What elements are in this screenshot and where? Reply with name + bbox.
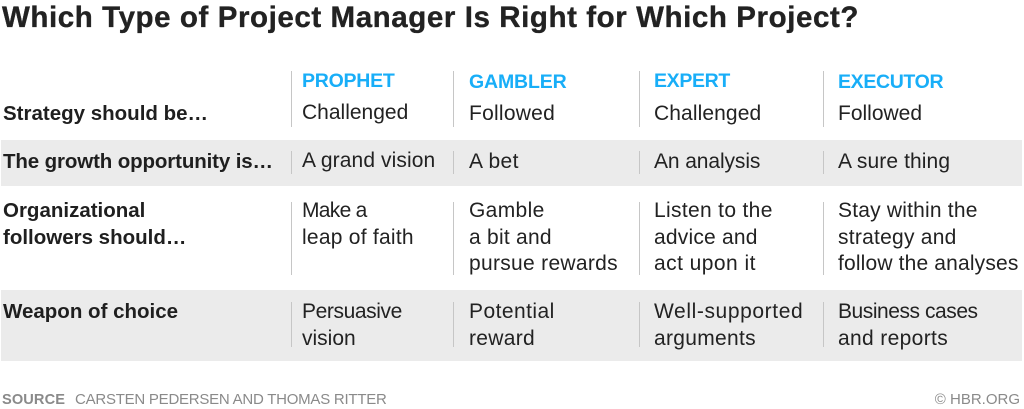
followers: executor: Stay within the [838, 199, 978, 222]
growth: expert: An analysis [654, 150, 760, 173]
title: Which Type of Project Manager Is Right for Which Project? [2, 1, 859, 34]
weapon: gambler: reward [469, 326, 535, 350]
row label: growth opportunity: The growth opportunity is… [3, 150, 273, 173]
growth: executor: A sure thing [838, 150, 950, 173]
weapon: prophet: Persuasive [302, 300, 402, 323]
growth: prophet: A grand vision [302, 149, 435, 172]
row band: growth opportunity [1, 140, 1022, 186]
weapon: prophet: vision [302, 326, 356, 350]
weapon: executor: Business cases [838, 300, 978, 323]
strategy: prophet: Challenged [302, 101, 408, 124]
row band: weapon of choice [1, 290, 1022, 361]
weapon: executor [838, 300, 978, 350]
row label: strategy: Strategy should be… [3, 102, 208, 125]
row label: weapon: Weapon of choice [3, 300, 178, 323]
followers: gambler: pursue rewards [469, 252, 618, 275]
row label: followers: followers should… [3, 226, 186, 248]
followers: executor: follow the analyses [838, 252, 1018, 275]
followers: executor [838, 199, 1018, 275]
weapon: expert: Well-supported [654, 300, 803, 323]
header: prophet: PROPHET [302, 70, 395, 92]
weapon: executor: and reports [838, 326, 948, 350]
weapon: prophet [302, 300, 402, 350]
followers: executor: strategy and [838, 226, 957, 248]
header: executor: EXECUTOR [838, 71, 943, 93]
followers: gambler: Gamble [469, 199, 545, 222]
strategy: expert: Challenged [654, 102, 761, 125]
source line: CARSTEN PEDERSEN AND THOMAS RITTER [75, 391, 387, 408]
row label: followers [3, 199, 186, 248]
weapon: gambler [469, 300, 555, 350]
followers: gambler [469, 199, 618, 275]
followers: prophet [302, 199, 414, 248]
followers: prophet: leap of faith [302, 226, 414, 248]
source line: SOURCE [2, 392, 65, 408]
strategy: executor: Followed [838, 102, 922, 125]
row label: followers: Organizational [3, 199, 145, 222]
followers: expert: Listen to the [654, 199, 773, 222]
header: expert: EXPERT [654, 70, 730, 92]
strategy: gambler: Followed [469, 102, 555, 125]
header: gambler: GAMBLER [469, 71, 567, 93]
followers: expert [654, 199, 773, 275]
weapon: gambler: Potential [469, 300, 555, 323]
weapon: expert: arguments [654, 326, 756, 350]
growth: gambler: A bet [469, 150, 519, 173]
followers: prophet: Make a [302, 199, 367, 222]
weapon: expert [654, 300, 803, 350]
followers: gambler: a bit and [469, 226, 552, 248]
followers: expert: advice and [654, 226, 758, 248]
followers: expert: act upon it [654, 252, 756, 275]
copyright: © HBR.ORG [935, 391, 1020, 408]
